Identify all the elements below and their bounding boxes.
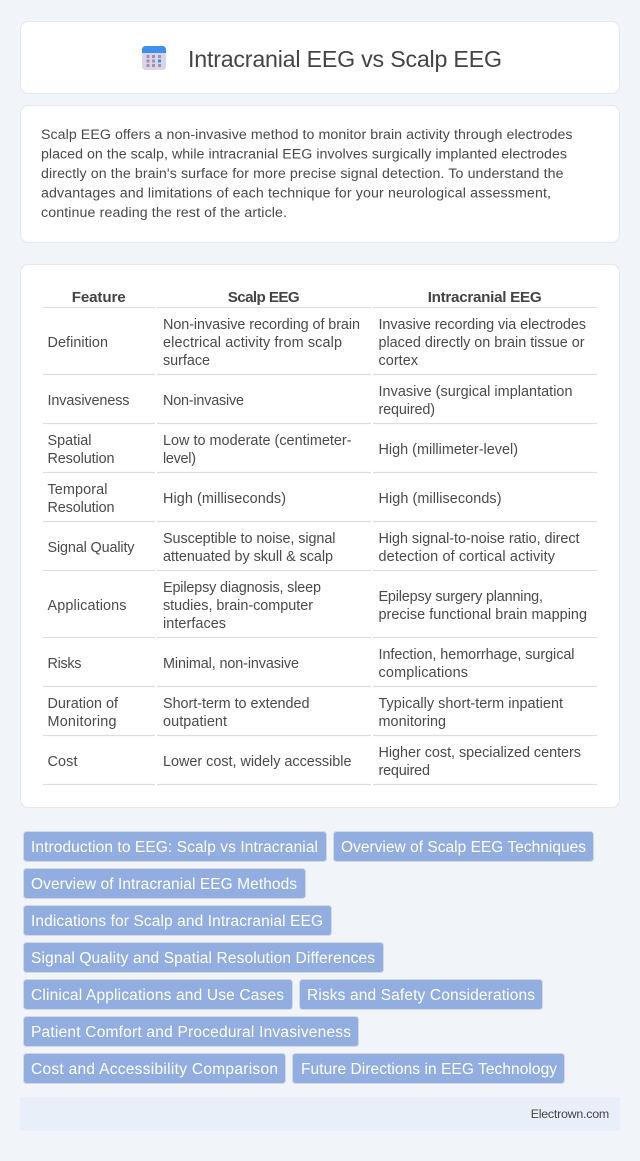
- footer: [20, 1097, 620, 1131]
- row: spatial resolution: Low to moderate (centimeter-: [163, 433, 352, 449]
- row: invasiveness: required): [378, 402, 435, 418]
- tag: indications: [24, 906, 332, 936]
- row: spatial resolution: level): [163, 451, 196, 467]
- tag: future directions: Future Directions in EEG Technology: [301, 1061, 557, 1078]
- table header row: Scalp EEG: [228, 289, 300, 306]
- intro paragraph: directly on the brain's surface for more precise signal detection. To understand the: [41, 166, 564, 182]
- row: applications: Applications: [48, 598, 126, 614]
- row: definition: surface: [163, 353, 210, 369]
- row: duration of monitoring: Monitoring: [48, 714, 116, 730]
- row: spatial resolution: Spatial: [48, 433, 92, 449]
- row: invasiveness: Non-invasive: [163, 393, 244, 409]
- row: cost: Cost: [48, 754, 78, 770]
- row: temporal resolution: [48, 482, 502, 516]
- row: cost: required: [378, 763, 430, 779]
- tag: future directions: [292, 1054, 564, 1084]
- row: signal quality: Susceptible to noise, signal: [163, 531, 336, 547]
- row: duration of monitoring: [48, 696, 563, 730]
- row: invasiveness: [48, 384, 572, 418]
- row: signal quality: detection of cortical activity: [378, 549, 556, 565]
- panel: title header: [20, 22, 620, 94]
- row: applications: [48, 580, 587, 632]
- row: temporal resolution: Resolution: [48, 500, 114, 516]
- row: definition: [48, 317, 586, 369]
- row: applications: Epilepsy diagnosis, sleep: [163, 580, 321, 596]
- row: definition: Non-invasive recording of brain: [163, 317, 360, 333]
- row: signal quality: [48, 531, 580, 565]
- row: signal quality: attenuated by skull & scalp: [163, 549, 333, 565]
- intro paragraph: continue reading the rest of the article.: [41, 205, 287, 221]
- tag: risks and safety: [300, 980, 542, 1010]
- row: cost: Lower cost, widely accessible: [163, 754, 352, 770]
- row: risks: Risks: [48, 656, 82, 672]
- row: definition: Definition: [48, 335, 108, 351]
- icon: calendar: [142, 46, 166, 70]
- tag: introduction: Introduction to EEG: Scalp vs Intracranial: [31, 839, 318, 856]
- tag: signal quality: Signal Quality and Spatial Resolution Differences: [31, 950, 375, 967]
- row: duration of monitoring: Typically short-term inpatient: [378, 696, 563, 712]
- tag: risks and safety: Risks and Safety Considerations: [307, 987, 535, 1004]
- tag: scalp techniques: [334, 832, 594, 862]
- row: temporal resolution: High (milliseconds): [163, 491, 286, 507]
- row: spatial resolution: High (millimeter-level): [378, 442, 518, 458]
- tag: patient comfort: Patient Comfort and Procedural Invasiveness: [31, 1024, 351, 1041]
- panel: comparison table: [20, 264, 620, 808]
- table header row: Intracranial EEG: [428, 289, 542, 306]
- row: temporal resolution: Temporal: [48, 482, 108, 498]
- row: spatial resolution: Resolution: [48, 451, 114, 467]
- tag: clinical applications: [24, 980, 292, 1010]
- intro paragraph: Scalp EEG offers a non-invasive method to monitor brain activity through electrodes: [41, 127, 572, 143]
- tag: signal quality: [24, 942, 384, 972]
- row: signal quality: High signal-to-noise ratio, direct: [378, 531, 580, 547]
- row: duration of monitoring: Short-term to extended: [163, 696, 310, 712]
- tag: intracranial methods: [24, 868, 306, 898]
- tag: cost and accessibility: [24, 1054, 286, 1084]
- row: definition: electrical activity from scalp: [163, 335, 342, 351]
- row: duration of monitoring: outpatient: [163, 714, 227, 730]
- tag: cost and accessibility: Cost and Accessibility Comparison: [31, 1061, 278, 1078]
- tag: patient comfort: [24, 1016, 358, 1046]
- table header row: Feature: [72, 289, 126, 306]
- row: applications: Epilepsy surgery planning,: [378, 589, 543, 605]
- row: invasiveness: Invasiveness: [48, 393, 130, 409]
- row: duration of monitoring: monitoring: [378, 714, 446, 730]
- row: temporal resolution: High (milliseconds): [378, 491, 502, 507]
- row: cost: Higher cost, specialized centers: [378, 745, 581, 761]
- panel: introduction: [20, 106, 620, 242]
- intro paragraph: [41, 127, 572, 221]
- topic tags: [24, 832, 594, 1084]
- row: cost: [48, 745, 581, 779]
- tag: introduction: [24, 832, 326, 862]
- row: applications: interfaces: [163, 616, 226, 632]
- footer: Electrown.com: [531, 1107, 609, 1121]
- row: risks: Minimal, non-invasive: [163, 656, 299, 672]
- intro paragraph: placed on the scalp, while intracranial EEG involves surgically implanted electrodes: [41, 146, 567, 162]
- row: applications: studies, brain-computer: [163, 598, 313, 614]
- row: signal quality: Signal Quality: [48, 540, 135, 556]
- row: duration of monitoring: Duration of: [48, 696, 119, 712]
- tag: scalp techniques: Overview of Scalp EEG Techniques: [341, 839, 586, 856]
- row: risks: Infection, hemorrhage, surgical: [378, 647, 574, 663]
- row: risks: [48, 647, 574, 681]
- row: applications: precise functional brain mapping: [378, 607, 587, 623]
- row: spatial resolution: [48, 433, 518, 467]
- row: definition: cortex: [378, 353, 419, 369]
- row: definition: Invasive recording via electrodes: [378, 317, 586, 333]
- intro paragraph: advantages and limitations of each technique for your neurological assessment,: [41, 186, 551, 202]
- tag: intracranial methods: Overview of Intracranial EEG Methods: [31, 876, 297, 893]
- row: risks: complications: [378, 665, 468, 681]
- title: Intracranial EEG vs Scalp EEG: [188, 46, 502, 72]
- tag: clinical applications: Clinical Applications and Use Cases: [31, 987, 284, 1004]
- row: invasiveness: Invasive (surgical implantation: [378, 384, 572, 400]
- row: definition: placed directly on brain tissue or: [378, 335, 585, 351]
- table header row: [72, 289, 542, 306]
- tag: indications: Indications for Scalp and Intracranial EEG: [31, 913, 323, 930]
